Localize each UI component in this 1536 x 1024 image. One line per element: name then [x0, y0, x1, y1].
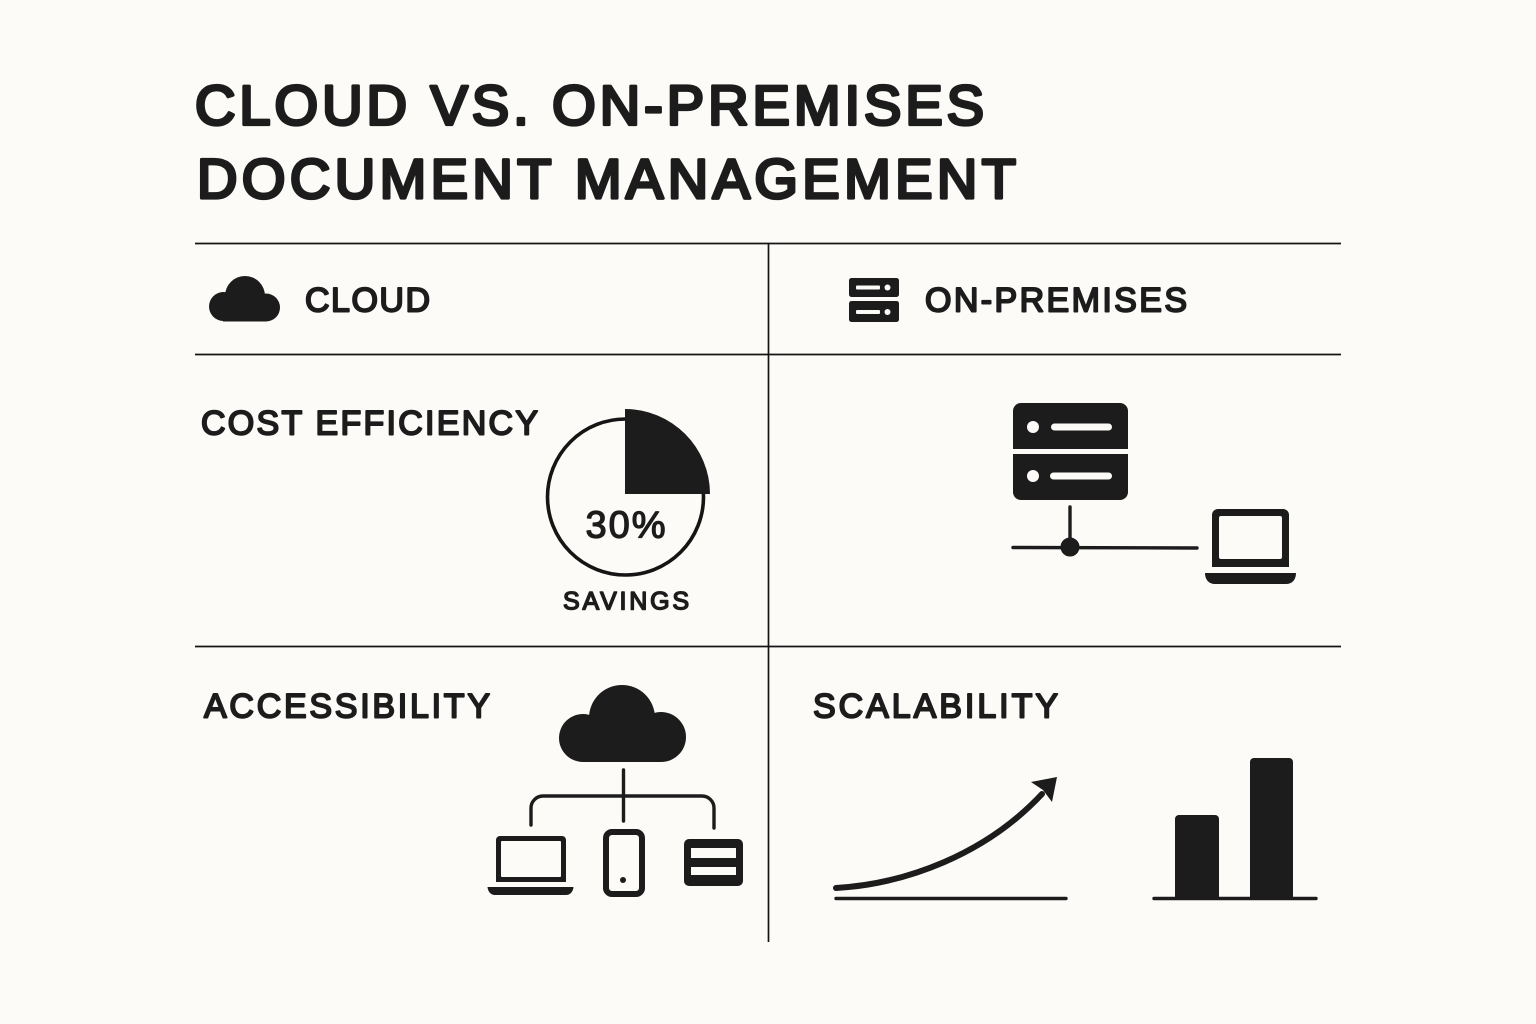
heading: cost efficiency: COST EFFICIENCY [201, 404, 538, 442]
panel: cloud column header [209, 276, 430, 322]
icon: phone [606, 832, 642, 894]
title [195, 74, 1016, 210]
panel: on-premises column header [849, 278, 1187, 322]
icon: small laptop [488, 836, 574, 895]
panel: scalability [813, 688, 1316, 898]
pie chart: 30% savings: 30% [586, 504, 666, 546]
panel: accessibility [204, 685, 743, 895]
pie chart: 30% savings [548, 409, 710, 575]
heading: accessibility: ACCESSIBILITY [204, 688, 490, 726]
icon: server [849, 278, 899, 322]
panel: on-premises network [1013, 403, 1296, 584]
network connector [1013, 507, 1197, 555]
title: DOCUMENT MANAGEMENT [197, 147, 1016, 210]
chart: bars [1154, 758, 1316, 898]
heading: on-premises: ON-PREMISES [925, 282, 1187, 320]
icon: laptop [1205, 509, 1296, 584]
connector tree [531, 770, 714, 828]
icon: cloud [209, 276, 280, 322]
chart: growth arrow [836, 777, 1066, 898]
icon: card storage [684, 839, 743, 886]
icon: large cloud [559, 685, 686, 762]
title: CLOUD VS. ON-PREMISES [195, 74, 984, 136]
panel: cost efficiency [201, 404, 710, 616]
heading: scalability: SCALABILITY [813, 688, 1058, 726]
icon: cloud with connected devices [488, 685, 743, 895]
label: savings: SAVINGS [563, 588, 689, 616]
icon: large server [1013, 403, 1128, 500]
heading: cloud: CLOUD [305, 282, 430, 320]
